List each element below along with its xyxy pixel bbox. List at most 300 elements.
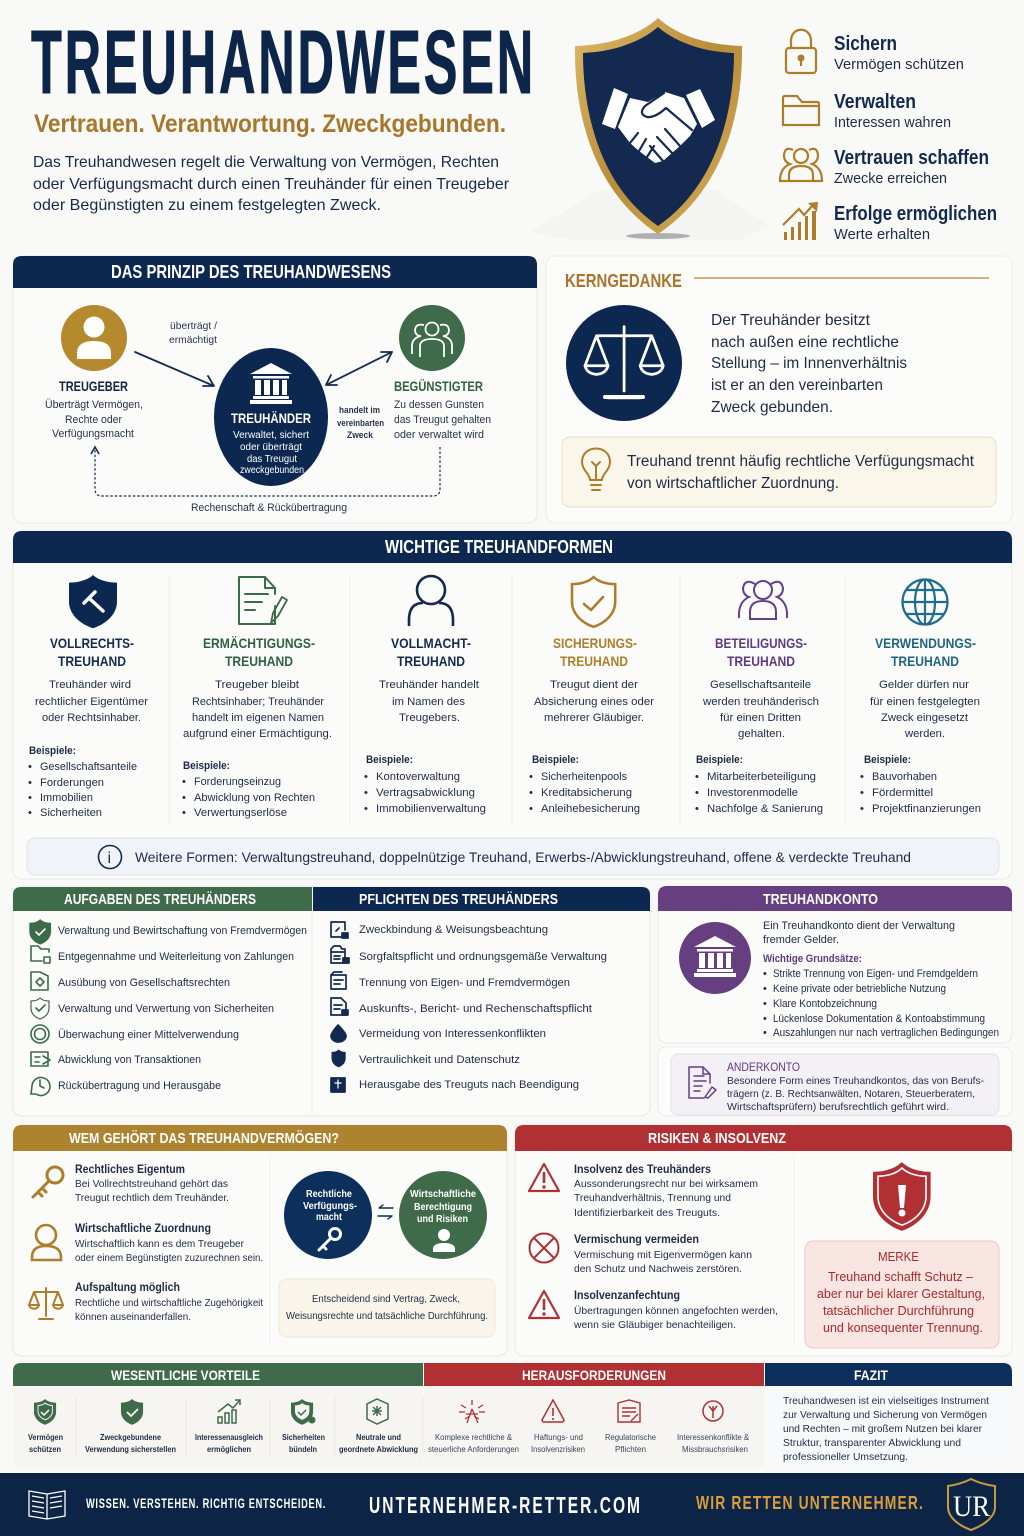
key point: Erfolge ermöglichen: Erfolge ermöglichen — [834, 203, 997, 225]
icon: lock — [786, 30, 816, 73]
heading: RISIKEN & INSOLVENZ — [648, 1130, 786, 1147]
Treuhänder: zweckgebunden — [240, 465, 304, 476]
examples: Anleihebesicherung — [541, 803, 640, 815]
icon: scales — [29, 1288, 63, 1319]
key point: Sichern: Vermögen schützen — [834, 57, 964, 73]
Begünstigter: Zu dessen Gunsten — [394, 399, 484, 411]
icon: cross circle — [530, 1234, 558, 1262]
item: Aufspaltung möglich: Rechtliche und wirtschaftliche Zugehörigkeit — [75, 1297, 263, 1309]
header — [31, 13, 997, 243]
callout: Merke: MERKE — [878, 1249, 919, 1264]
examples: Abwicklung von Rechten — [194, 792, 315, 804]
examples: • — [28, 761, 32, 773]
text: Fazit — [783, 1395, 989, 1463]
item: Vermischung vermeiden: den Schutz und Nachweis zerstören. — [574, 1263, 742, 1275]
item: Vermögen schützen: Vermögen — [28, 1432, 63, 1442]
key point: Vertrauen schaffen — [834, 147, 989, 187]
arrow label — [169, 320, 217, 346]
heading: TREUHAND — [891, 653, 959, 669]
circle: Wirtschaftliche Berechtigung: Berechtigung — [414, 1202, 472, 1213]
icon: key — [33, 1167, 63, 1197]
description — [183, 679, 332, 740]
heading: SICHERUNGS- — [553, 635, 637, 651]
text: Kerngedanke: Stellung – im Innenverhältnis — [711, 355, 907, 372]
item: Zweckgebundene Verwendung — [85, 1399, 176, 1454]
text: Fazit: und Rechten – mit großem Nutzen bei klarer — [783, 1423, 982, 1435]
text: Anderkonto — [727, 1060, 984, 1113]
callout: Merke: tatsächlicher Durchführung — [823, 1303, 974, 1318]
Begünstigter: BEGÜNSTIGTER — [394, 378, 483, 394]
description: im Namen des — [392, 696, 465, 708]
examples: • — [529, 787, 533, 799]
label: Rechenschaft: Rechenschaft & Rückübertragung — [191, 502, 347, 514]
examples — [28, 745, 137, 819]
panel: Kerngedanke — [546, 256, 1012, 523]
panel: Herausforderungen — [424, 1363, 764, 1467]
Begünstigter — [394, 305, 491, 441]
item: Insolvenzanfechtung: wenn sie Gläubiger benachteiligen. — [573, 1319, 736, 1331]
heading: WEM GEHÖRT DAS TREUHANDVERMÖGEN? — [69, 1130, 339, 1147]
info bar: i — [108, 850, 111, 867]
panel: Risiken und Insolvenz — [515, 1125, 1012, 1356]
item: Regulatorische Pflichten: Regulatorische — [605, 1433, 657, 1442]
description: werden treuhänderisch — [702, 696, 819, 708]
callout: Weisungsrechte und tatsächliche Durchführung. — [286, 1310, 488, 1322]
examples: • — [28, 807, 32, 819]
examples: Beispiele: — [532, 754, 579, 766]
icon: shield with tools — [69, 575, 117, 628]
list items: Vertraulichkeit und Datenschutz — [359, 1054, 520, 1066]
item: Vermischung vermeiden: Vermischung vermeiden — [574, 1232, 699, 1246]
examples: Fördermittel — [872, 787, 933, 799]
callout — [279, 1279, 495, 1337]
Treugeber: Überträgt Vermögen, — [45, 399, 143, 411]
key points — [780, 30, 997, 243]
circle: Rechtliche Verfügungsmacht: Verfügungs- — [303, 1201, 357, 1212]
item: Wirtschaftliche Zuordnung: Wirtschaftliche Zuordnung — [75, 1221, 211, 1235]
heading: TREUHAND — [560, 653, 628, 669]
examples: Forderungseinzug — [194, 776, 281, 788]
text: Kerngedanke — [711, 312, 907, 416]
description: Absicherung eines oder — [534, 696, 654, 708]
item: Insolvenzanfechtung: Übertragungen können angefochten werden, — [574, 1305, 778, 1317]
tagline: WISSEN. VERSTEHEN. RICHTIG ENTSCHEIDEN. — [86, 1496, 326, 1511]
item: Neutrale Abwicklung — [339, 1399, 418, 1454]
description: handelt im eigenen Namen — [192, 712, 324, 724]
text: Kerngedanke: nach außen eine rechtliche — [711, 334, 899, 351]
item: Regulatorische Pflichten: Pflichten — [615, 1445, 646, 1454]
item: Sicherheiten bündeln — [282, 1399, 325, 1454]
description: oder Rechtsinhaber. — [42, 712, 141, 724]
examples: • — [182, 776, 186, 788]
heading: PFLICHTEN DES TREUHÄNDERS — [359, 891, 558, 908]
heading — [50, 635, 134, 669]
item: Aufspaltung möglich: Aufspaltung möglich — [75, 1280, 180, 1294]
list items: Zweckbindung & Weisungsbeachtung — [359, 924, 548, 936]
list items: Auskunfts-, Bericht- und Rechenschaftspflicht — [359, 1003, 592, 1015]
description: Treuhänder handelt — [379, 679, 480, 691]
callout: Merke: aber nur bei klarer Gestaltung, — [817, 1286, 985, 1301]
item: Vermögen schützen — [28, 1399, 63, 1454]
examples: • — [860, 771, 864, 783]
examples: Projektfinanzierungen — [872, 803, 981, 815]
list items: Sorgfaltspflicht und ordnungsgemäße Verwaltung — [359, 951, 607, 963]
item: Vermischung vermeiden — [574, 1232, 752, 1275]
column: Vollrechts-Treuhand — [28, 575, 148, 819]
examples: Sicherheitenpools — [541, 771, 627, 783]
icon: book — [29, 1491, 65, 1519]
key point: Verwalten: Interessen wahren — [834, 115, 951, 131]
list items: Trennung von Eigen- und Fremdvermögen — [359, 977, 570, 989]
item: Sicherheiten bündeln: Sicherheiten — [282, 1432, 325, 1442]
item: Vermischung vermeiden: Vermischung mit Eigenvermögen kann — [574, 1249, 752, 1261]
heading: ERMÄCHTIGUNGS- — [203, 635, 315, 651]
heading — [203, 635, 315, 669]
examples: Nachfolge & Sanierung — [707, 803, 823, 815]
circle: Wirtschaftliche Berechtigung: Wirtschaftliche — [410, 1189, 476, 1200]
examples: Beispiele: — [29, 745, 76, 757]
heading: VERWENDUNGS- — [875, 635, 976, 651]
item: Vermögen schützen: schützen — [29, 1444, 61, 1454]
Treugeber: TREUGEBER — [59, 378, 128, 394]
examples: Immobilienverwaltung — [376, 803, 486, 815]
examples: Verwertungserlöse — [194, 807, 287, 819]
item: Zweckgebundene Verwendung: Zweckgebundene — [100, 1432, 161, 1442]
item: Aufspaltung möglich — [75, 1280, 263, 1323]
key point: Sichern — [834, 33, 964, 73]
examples: • — [182, 792, 186, 804]
item: Rechtliches Eigentum: Rechtliches Eigentum — [75, 1162, 185, 1176]
description: Treuhänder wird — [49, 679, 131, 691]
heading — [391, 635, 471, 669]
examples: Bauvorhaben — [872, 771, 937, 783]
icon: shield with check — [572, 577, 615, 627]
heading: KERNGEDANKE — [565, 271, 682, 291]
examples: • — [695, 771, 699, 783]
description: Rechtsinhaber; Treuhänder — [192, 696, 324, 708]
text: Treuhandkonto: Keine private oder betriebliche Nutzung — [773, 983, 946, 995]
item: Haftungsrisiken: Haftungs- und — [534, 1433, 583, 1442]
Treugeber: Verfügungsmacht — [52, 428, 134, 440]
examples: Forderungen — [40, 777, 104, 789]
list items: Überwachung einer Mittelverwendung — [58, 1029, 239, 1041]
text: Treuhandkonto: • — [763, 983, 767, 995]
description: mehrerer Gläubiger. — [544, 712, 644, 724]
list items: Verwaltung und Bewirtschaftung von Fremdvermögen — [58, 925, 307, 937]
arrow label: zweck — [337, 405, 384, 441]
text: Kerngedanke: ist er an den vereinbarten — [711, 377, 883, 394]
callout — [562, 437, 996, 507]
info bar — [27, 838, 999, 875]
icon: folder — [783, 96, 819, 125]
panel: Anderkonto — [658, 1047, 1012, 1116]
text: Treuhandkonto: Ein Treuhandkonto dient der Verwaltung — [763, 920, 955, 932]
item: Komplexe Anforderungen: steuerliche Anforderungen — [428, 1445, 519, 1454]
subtitle: Vertrauen. Verantwortung. Zweckgebunden. — [34, 110, 506, 138]
item: Insolvenz des Treuhänders — [574, 1162, 758, 1219]
examples: • — [529, 803, 533, 815]
Begünstigter: das Treugut gehalten — [394, 414, 491, 426]
item: Aufspaltung möglich: können auseinanderfallen. — [75, 1311, 191, 1323]
text: Anderkonto: trägern (z. B. Rechtsanwälten, Notaren, Steuerberatern, — [727, 1088, 975, 1100]
item: Insolvenz des Treuhänders: Aussonderungsrecht nur bei wirksamem — [574, 1178, 758, 1190]
text: Anderkonto: ANDERKONTO — [727, 1060, 800, 1074]
examples: • — [28, 777, 32, 789]
key point: Sichern: Sichern — [834, 33, 897, 55]
item: Interessenausgleich — [195, 1400, 263, 1454]
text: Kerngedanke: Zweck gebunden. — [711, 399, 833, 416]
item: Interessenausgleich: Interessenausgleich — [195, 1432, 263, 1442]
text: Treuhandkonto: • — [763, 1013, 767, 1025]
text: Treuhandkonto: • — [763, 968, 767, 980]
arrow label: überträgt / — [170, 320, 217, 332]
Treuhänder: Verwaltet, sichert — [233, 430, 309, 441]
intro text: oder Begünstigten zu einem festgelegten Zweck. — [33, 197, 381, 214]
item: Interessenausgleich: ermöglichen — [207, 1444, 251, 1454]
description: Zweck eingesetzt — [881, 712, 969, 724]
icon: warning — [529, 1164, 559, 1191]
panel: Wichtige Treuhandformen — [13, 531, 1012, 879]
examples: • — [860, 803, 864, 815]
heading — [875, 635, 976, 669]
heading: VOLLMACHT- — [391, 635, 471, 651]
panel: Das Prinzip des Treuhandwesens — [13, 256, 537, 523]
column: Verwendungs-Treuhand — [860, 579, 981, 815]
examples: Kontoverwaltung — [376, 771, 460, 783]
heading: TREUHAND — [225, 653, 293, 669]
item: Sicherheiten bündeln: bündeln — [289, 1444, 317, 1454]
arrow label: ermächtigt — [169, 334, 217, 346]
item: Interessenkonflikte: Missbrauchsrisiken — [682, 1445, 748, 1454]
item: Rechtliches Eigentum: Bei Vollrechtstreuhand gehört das — [75, 1178, 228, 1190]
icon: warning — [529, 1291, 559, 1318]
heading: TREUHAND — [727, 653, 795, 669]
item: Komplexe Anforderungen — [428, 1400, 519, 1454]
text: Kerngedanke: Der Treuhänder besitzt — [711, 312, 871, 329]
description: Treugut dient der — [550, 679, 638, 691]
examples: Beispiele: — [864, 754, 911, 766]
icon: growth chart — [783, 202, 818, 240]
text: Treuhandkonto — [763, 920, 999, 1039]
list items: Herausgabe des Treuguts nach Beendigung — [359, 1079, 579, 1091]
examples: • — [860, 787, 864, 799]
heading: HERAUSFORDERUNGEN — [522, 1367, 666, 1383]
icon: globe — [902, 579, 948, 625]
text: Treuhandkonto: Strikte Trennung von Eigen- und Fremdgeldern — [773, 968, 978, 980]
list items: Ausübung von Gesellschaftsrechten — [58, 977, 230, 989]
description: aufgrund einer Ermächtigung. — [183, 728, 332, 740]
item: Neutrale Abwicklung: Neutrale und — [356, 1432, 401, 1442]
panel: Aufgaben — [30, 891, 307, 1096]
callout: Merke — [805, 1241, 999, 1348]
icon: person — [409, 576, 453, 626]
logo: UR shield — [948, 1479, 995, 1530]
logo: UR shield: UR — [953, 1490, 990, 1523]
description — [379, 679, 480, 724]
arrow: double arrow to Begünstigter — [326, 352, 392, 385]
Treugeber — [45, 305, 143, 440]
heading: VOLLRECHTS- — [50, 635, 134, 651]
column: Sicherungs-Treuhand — [529, 577, 654, 815]
website: UNTERNEHMER-RETTER.COM — [369, 1492, 642, 1518]
list items: Rückübertragung und Herausgabe — [58, 1080, 221, 1092]
description — [534, 679, 654, 724]
examples: • — [182, 807, 186, 819]
item: Neutrale Abwicklung: geordnete Abwicklung — [339, 1444, 418, 1454]
icon: shield with handshake — [530, 18, 770, 240]
panel: Treuhandkonto — [658, 886, 1012, 1043]
arrow label: zweck: handelt im — [339, 405, 380, 416]
item: Rechtliches Eigentum: Treugut rechtlich dem Treuhänder. — [75, 1192, 229, 1204]
callout: Merke: Treuhand schafft Schutz – — [828, 1269, 974, 1284]
heading: BETEILIGUNGS- — [715, 635, 807, 651]
description — [35, 679, 148, 724]
text: Fazit: Treuhandwesen ist ein vielseitiges Instrument — [783, 1395, 989, 1407]
list items: Abwicklung von Transaktionen — [58, 1054, 201, 1066]
examples: Beispiele: — [183, 760, 230, 772]
heading: AUFGABEN DES TREUHÄNDERS — [64, 891, 256, 908]
description: für einen festgelegten — [870, 696, 980, 708]
description: werden. — [904, 728, 945, 740]
intro text — [33, 154, 510, 214]
examples — [364, 754, 486, 815]
examples: Vertragsabwicklung — [376, 787, 475, 799]
slogan: WIR RETTEN UNTERNEHMER. — [696, 1493, 924, 1513]
examples: Sicherheiten — [40, 807, 102, 819]
description: Gelder dürfen nur — [879, 679, 969, 691]
text: Treuhandkonto: • — [763, 998, 767, 1010]
Treugeber: Rechte oder — [65, 414, 122, 426]
heading: WICHTIGE TREUHANDFORMEN — [385, 537, 613, 557]
text: Fazit: zur Verwaltung und Sicherung von Vermögen — [783, 1409, 987, 1421]
footer — [0, 1473, 1024, 1536]
info bar: Weitere Formen: Verwaltungstreuhand, doppelnützige Treuhand, Erwerbs-/Abwicklungstreuhand, offene & verdeckte Treuhand — [135, 849, 911, 865]
examples: Beispiele: — [366, 754, 413, 766]
text: Anderkonto: Besondere Form eines Treuhandkontos, das von Berufs- — [727, 1075, 984, 1087]
circle: Wirtschaftliche Berechtigung: und Risiken — [417, 1214, 468, 1225]
title: TREUHANDWESEN — [31, 13, 536, 113]
examples — [182, 760, 315, 819]
icon list — [331, 922, 349, 1092]
column: Beteiligungs-Treuhand — [695, 581, 823, 815]
item: Insolvenz des Treuhänders: Insolvenz des Treuhänders — [574, 1162, 711, 1176]
heading: TREUHAND — [397, 653, 465, 669]
item: Interessenkonflikte: Interessenkonflikte & — [677, 1433, 750, 1442]
intro text: oder Verfügungsmacht durch einen Treuhänder für einen Treugeber — [33, 176, 510, 193]
item: Haftungsrisiken: Insolvenzrisiken — [531, 1445, 585, 1454]
icon: document — [689, 1067, 716, 1098]
text: Fazit: professioneller Umsetzung. — [783, 1451, 908, 1463]
examples: • — [28, 792, 32, 804]
intro text: Das Treuhandwesen regelt die Verwaltung von Vermögen, Rechten — [33, 154, 499, 171]
callout: Merke: und konsequenter Trennung. — [823, 1320, 983, 1335]
panel: Pflichten — [331, 891, 607, 1092]
heading: WESENTLICHE VORTEILE — [111, 1367, 260, 1383]
panel: Aufgaben und Pflichten — [13, 887, 650, 1116]
item: Wirtschaftliche Zuordnung — [75, 1221, 263, 1264]
icon: scales — [566, 305, 682, 421]
examples: Immobilien — [40, 792, 93, 804]
callout: Entscheidend sind Vertrag, Zweck, — [312, 1293, 460, 1305]
description: für einen Dritten — [720, 712, 801, 724]
circle: Rechtliche Verfügungsmacht — [284, 1171, 372, 1259]
examples: Gesellschaftsanteile — [40, 761, 137, 773]
heading: TREUHANDKONTO — [763, 891, 878, 908]
Treuhänder: TREUHÄNDER — [231, 410, 311, 426]
item: Insolvenz des Treuhänders: Identifizierbarkeit des Treuguts. — [574, 1207, 720, 1219]
examples: Beispiele: — [696, 754, 743, 766]
examples — [695, 754, 823, 815]
examples: • — [364, 787, 368, 799]
key point: Vertrauen schaffen: Vertrauen schaffen — [834, 147, 989, 169]
list items: Vermeidung von Interessenkonflikten — [359, 1028, 546, 1040]
examples: • — [695, 787, 699, 799]
heading — [553, 635, 637, 669]
item: Wirtschaftliche Zuordnung: Wirtschaftlich kann es dem Treugeber — [75, 1238, 244, 1250]
list items: Verwaltung und Verwertung von Sicherheiten — [58, 1003, 274, 1015]
examples: Investorenmodelle — [707, 787, 798, 799]
examples: Kreditabsicherung — [541, 787, 632, 799]
column: Ermächtigungs-Treuhand — [182, 577, 332, 819]
text: Anderkonto: Wirtschaftsprüfern) berufsrechtlich geführt wird. — [727, 1101, 949, 1113]
examples — [860, 754, 981, 815]
examples: Mitarbeiterbeteiligung — [707, 771, 816, 783]
column: Vollmacht-Treuhand — [364, 576, 486, 815]
description: Treugeber bleibt — [215, 679, 300, 691]
heading: FAZIT — [854, 1367, 888, 1383]
callout: Treuhand trennt häufig rechtliche Verfügungsmacht — [627, 453, 975, 470]
icon: person outline — [32, 1225, 61, 1260]
Treuhänder: das Treugut — [247, 454, 297, 465]
text: Treuhandkonto: Klare Kontobzeichnung — [773, 998, 877, 1010]
key point: Erfolge ermöglichen: Werte erhalten — [834, 227, 930, 243]
arrow label: zweck: Zweck — [347, 430, 374, 441]
text: Treuhandkonto: • — [763, 1027, 767, 1039]
heading — [715, 635, 807, 669]
examples: • — [529, 771, 533, 783]
icon: red shield — [873, 1162, 931, 1231]
heading: TREUHAND — [58, 653, 126, 669]
examples — [529, 754, 640, 815]
description: rechtlicher Eigentümer — [35, 696, 148, 708]
panel: Wem gehört das Treuhandvermögen — [13, 1125, 507, 1356]
text: Fazit: Struktur, transparenter Abwicklung und — [783, 1437, 961, 1449]
description: Gesellschaftsanteile — [710, 679, 811, 691]
item: Insolvenz des Treuhänders: Treuhandverhältnis, Trennung und — [574, 1192, 731, 1204]
text: Treuhandkonto: Auszahlungen nur nach vertraglichen Bedingungen — [773, 1027, 999, 1039]
item: Komplexe Anforderungen: Komplexe rechtliche & — [435, 1433, 513, 1442]
text: Treuhandkonto: Lückenlose Dokumentation & Kontoabstimmung — [773, 1013, 985, 1025]
circle: Rechtliche Verfügungsmacht: macht — [316, 1212, 343, 1223]
item: Wirtschaftliche Zuordnung: oder einem Begünstigten zuzurechnen sein. — [75, 1252, 263, 1264]
description: Treugebers. — [399, 712, 460, 724]
heading: DAS PRINZIP DES TREUHANDWESENS — [111, 262, 391, 282]
Treuhänder — [214, 348, 328, 486]
arrow label: zweck: vereinbarten — [337, 418, 384, 429]
arrow: Rechenschaft — [91, 447, 440, 496]
icon: group — [739, 581, 787, 619]
item: Insolvenzanfechtung — [573, 1288, 778, 1331]
icon list — [30, 920, 50, 1096]
description: gehalten. — [738, 728, 785, 740]
icon: people — [780, 149, 822, 181]
item: Insolvenzanfechtung: Insolvenzanfechtung — [574, 1288, 680, 1302]
key point: Vertrauen schaffen: Zwecke erreichen — [834, 171, 947, 187]
description — [870, 679, 980, 740]
item: Regulatorische Pflichten — [605, 1400, 657, 1454]
examples: • — [364, 771, 368, 783]
icon: document with pen — [239, 577, 287, 624]
